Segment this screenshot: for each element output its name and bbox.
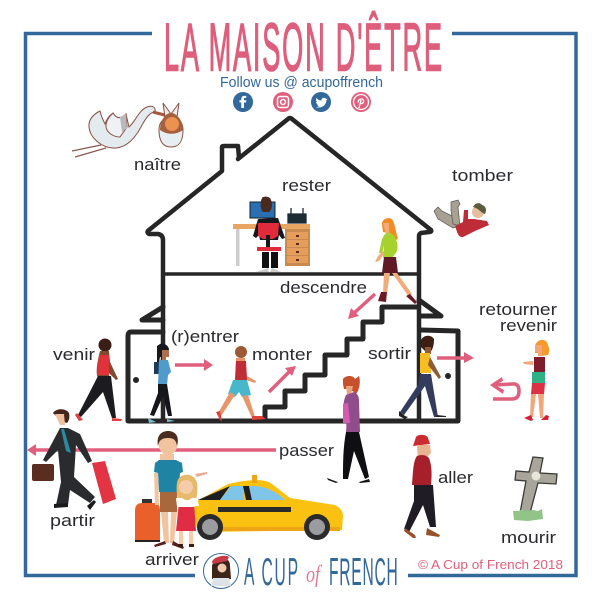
label: aller: aller — [438, 468, 473, 487]
icon: twitter — [311, 92, 331, 112]
label: sortir: sortir — [368, 344, 411, 363]
woman entering with backpack — [148, 344, 175, 423]
label: (r)entrer: (r)entrer — [171, 327, 239, 346]
label: mourir: mourir — [501, 528, 556, 547]
family and taxi — [135, 431, 343, 549]
woman returning — [523, 340, 549, 421]
label: passer: passer — [279, 441, 334, 460]
arrow: monter — [269, 366, 296, 392]
copyright: © A Cup of French 2018 — [418, 558, 563, 572]
man — [43, 409, 96, 510]
label: naître: naître — [134, 155, 181, 174]
man walking upstairs — [216, 346, 266, 421]
icon: falling man — [434, 200, 489, 237]
person — [253, 197, 285, 272]
taxi — [194, 475, 343, 540]
logo text: FRENCH — [329, 551, 398, 594]
label: retourner revenir: retourner — [479, 300, 557, 319]
door knobs — [133, 373, 451, 383]
logo text: of — [306, 562, 322, 588]
monitor — [250, 202, 275, 218]
arrow: entrer — [175, 359, 213, 371]
icon: stork with baby — [72, 103, 183, 157]
suitcase red — [92, 461, 116, 504]
router — [288, 208, 306, 223]
icon: grave cross — [513, 457, 557, 521]
arrow: u-turn — [490, 377, 519, 399]
desk with person at computer — [233, 197, 310, 272]
title: LA MAISON D'ÊTRE — [164, 9, 442, 85]
desk leg — [236, 229, 240, 266]
drawers — [285, 229, 310, 266]
logo portrait — [204, 554, 238, 588]
woman in red walking — [75, 338, 122, 421]
label: venir: venir — [53, 345, 95, 364]
label: monter: monter — [252, 345, 312, 364]
girl — [176, 472, 207, 547]
arrow: descendre — [348, 294, 375, 319]
orange suitcase — [135, 499, 160, 542]
man partir with suitcase — [32, 409, 116, 510]
label: descendre: descendre — [280, 278, 367, 297]
label: retourner revenir: revenir — [500, 316, 557, 335]
icon: instagram — [273, 92, 293, 112]
social icons — [233, 92, 371, 112]
man — [154, 431, 184, 549]
logo text: A CUP — [244, 551, 298, 594]
label: retourner revenir — [479, 300, 557, 335]
man aller — [404, 435, 440, 538]
icon: pinterest — [351, 92, 371, 112]
icon: facebook — [233, 92, 253, 112]
woman going downstairs — [375, 218, 417, 304]
arrow: sortir — [437, 352, 474, 363]
logo — [204, 551, 398, 594]
passer arrow — [27, 444, 276, 456]
desk top — [233, 224, 310, 229]
logo text — [244, 551, 398, 594]
label: rester: rester — [282, 176, 331, 195]
man exiting — [399, 336, 446, 419]
woman on phone — [327, 376, 370, 483]
house outline — [128, 118, 458, 421]
label: tomber: tomber — [452, 166, 513, 185]
label: partir: partir — [50, 511, 95, 530]
briefcase — [32, 464, 54, 481]
label: arriver: arriver — [145, 550, 199, 569]
follow us line: Follow us @ acupoffrench — [220, 75, 383, 91]
